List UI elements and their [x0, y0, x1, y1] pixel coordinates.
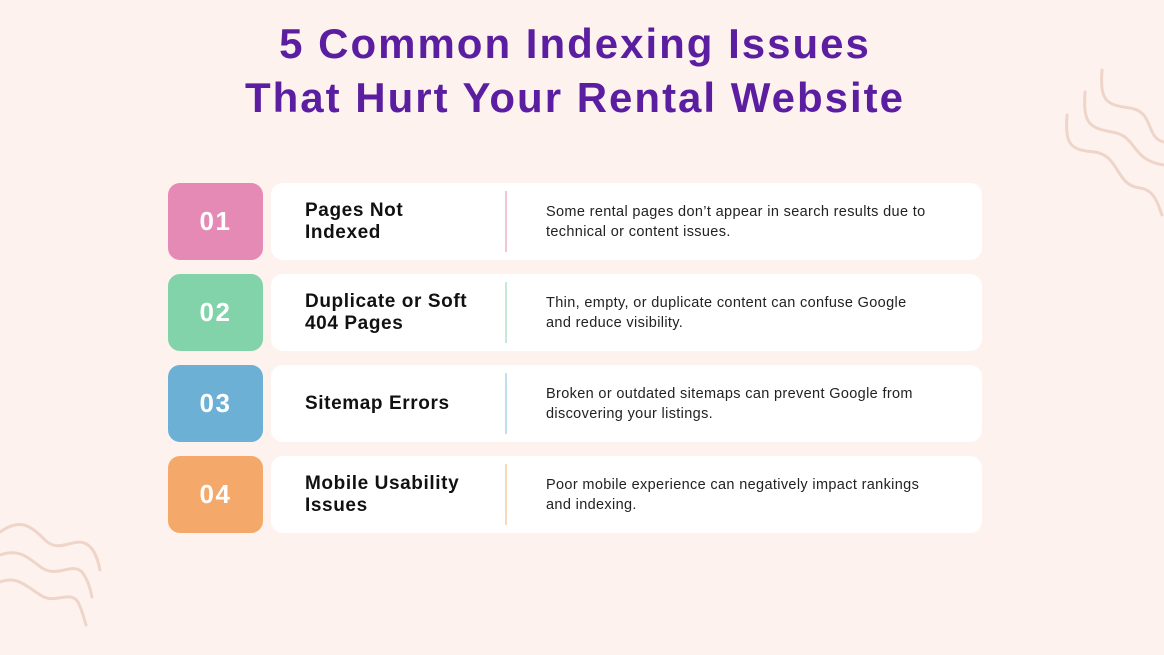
card 01: Indexed [305, 222, 381, 242]
card 02 [271, 274, 982, 351]
card 04: Mobile Usability [305, 472, 459, 494]
card 04: Issues [305, 494, 368, 516]
card 01: Some rental pages don’t appear in search results due to technical or content issues. [546, 204, 926, 240]
badge 04: 04 [200, 479, 231, 509]
badge 01 [168, 183, 263, 260]
title: 5 Common Indexing Issues [279, 20, 871, 67]
decoration: bottom-left waves [0, 523, 102, 626]
title: That Hurt Your Rental Website [245, 74, 905, 121]
badge 02 [168, 274, 263, 351]
decoration: top-right waves [1065, 68, 1164, 216]
badge 04 [168, 456, 263, 533]
card 01 [271, 183, 982, 260]
card 03 [271, 365, 982, 442]
card 02: 404 Pages [305, 312, 403, 334]
card 03: Broken or outdated sitemaps can prevent Google from discovering your listings. [546, 386, 913, 422]
row 03 [168, 365, 982, 442]
card 01: Pages Not [305, 200, 403, 220]
card 03: Sitemap Errors [305, 392, 450, 414]
row 02 [168, 274, 982, 351]
badge 01: 01 [200, 206, 231, 236]
row 04 [168, 456, 982, 533]
card 04 [271, 456, 982, 533]
badge 02: 02 [200, 297, 231, 327]
card 02: Thin, empty, or duplicate content can confuse Google and reduce visibility. [546, 294, 906, 330]
card 02: Duplicate or Soft [305, 290, 467, 312]
card 04: Poor mobile experience can negatively impact rankings and indexing. [546, 476, 919, 512]
title [245, 20, 905, 121]
row 01 [168, 183, 982, 260]
badge 03: 03 [200, 388, 231, 418]
badge 03 [168, 365, 263, 442]
